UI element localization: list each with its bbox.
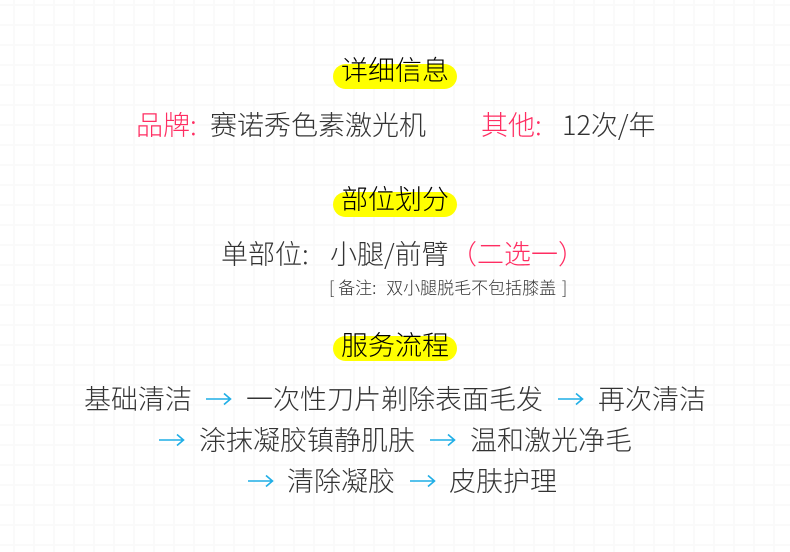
highlight pill: details xyxy=(333,64,457,89)
arrow xyxy=(159,434,185,446)
section: details xyxy=(136,49,656,143)
highlight pill: area division xyxy=(333,192,457,217)
remark: [ 备注: 双小腿脱毛不包括膝盖 ] xyxy=(329,274,567,299)
step: skin care: 皮肤护理 xyxy=(449,460,557,499)
arrow xyxy=(248,474,274,488)
section: area division xyxy=(221,178,585,299)
step: shaving: 一次性刀片剃除表面毛发 xyxy=(246,378,543,417)
single area label: 单部位: xyxy=(221,233,309,272)
arrow xyxy=(558,392,584,406)
highlight pill: service process xyxy=(333,336,457,361)
arrow xyxy=(206,392,232,406)
step: remove gel: 清除凝胶 xyxy=(287,460,395,499)
heading: area division: 部位划分 xyxy=(341,178,449,217)
arrow xyxy=(430,434,456,446)
other value: 12次/年 xyxy=(562,104,656,143)
single area value: 小腿/前臂 xyxy=(330,233,449,272)
heading: details: 详细信息 xyxy=(341,49,449,88)
arrow xyxy=(410,474,436,488)
choice note: （二选一） xyxy=(450,233,585,272)
heading: service process: 服务流程 xyxy=(341,324,449,363)
other label: 其他: xyxy=(481,104,542,143)
step: apply gel: 涂抹凝胶镇静肌肤 xyxy=(199,419,415,458)
section: service process xyxy=(84,324,706,499)
step: laser: 温和激光净毛 xyxy=(470,419,632,458)
step: clean again: 再次清洁 xyxy=(598,378,706,417)
brand label: 品牌: xyxy=(136,104,197,143)
step: basic cleaning: 基础清洁 xyxy=(84,378,192,417)
brand value: 赛诺秀色素激光机 xyxy=(210,104,426,143)
